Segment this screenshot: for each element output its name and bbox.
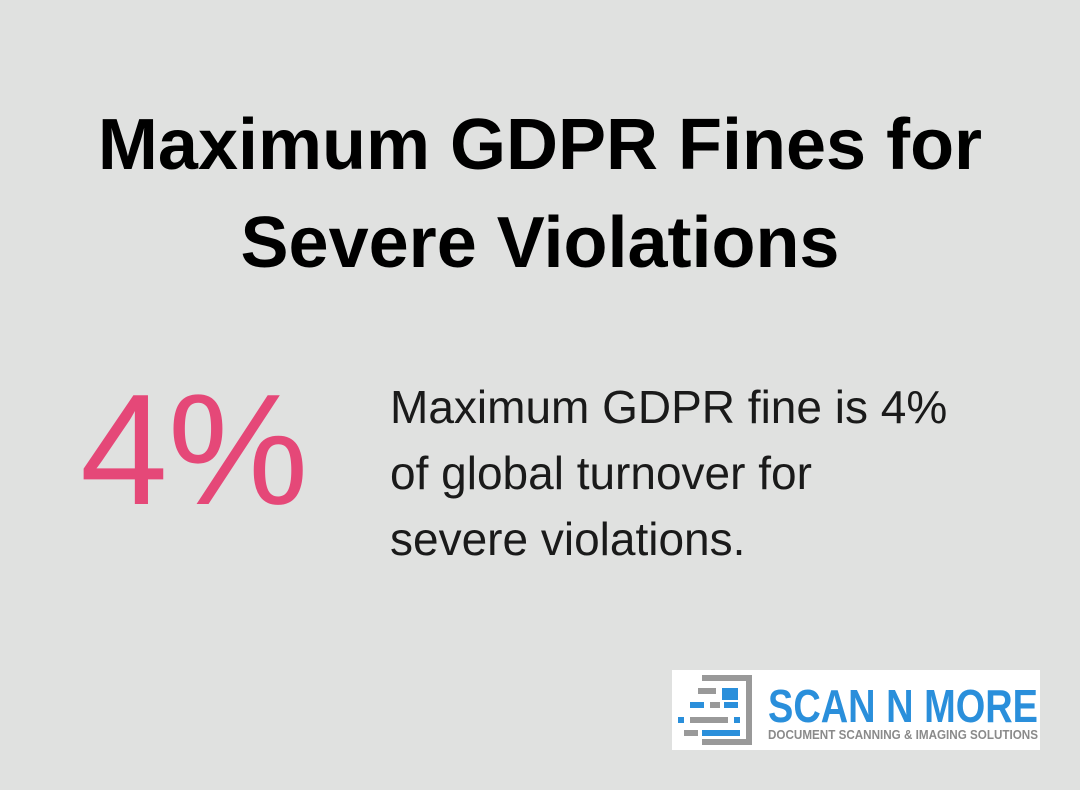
title: Severe Violations: [241, 203, 839, 283]
description: severe violations.: [390, 513, 745, 565]
description: of global turnover for: [390, 447, 812, 499]
big stat: 4%: [80, 362, 308, 538]
title: [98, 105, 982, 283]
description: [390, 381, 947, 565]
description: Maximum GDPR fine is 4%: [390, 381, 947, 433]
icon: scanner: [678, 675, 752, 745]
logo: [672, 670, 1040, 750]
title: Maximum GDPR Fines for: [98, 105, 982, 185]
